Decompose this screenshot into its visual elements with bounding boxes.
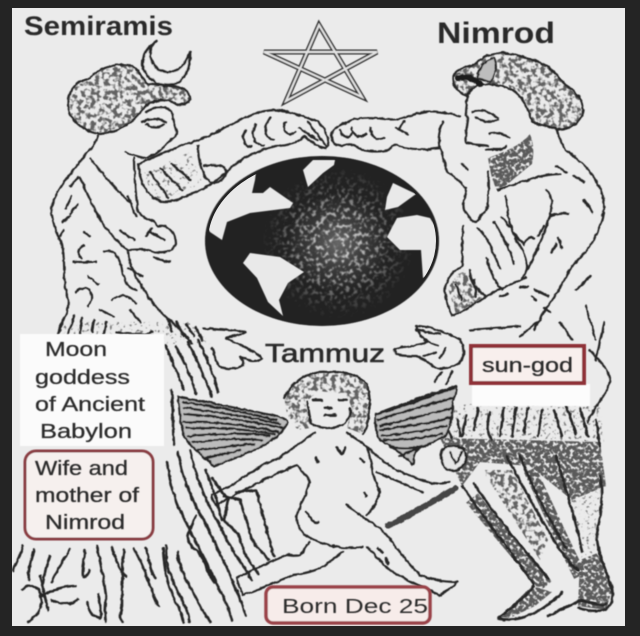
Nimrod calf and feet grain (578, 552, 612, 610)
Tammuz face (307, 402, 351, 428)
Nimrod right arm contour (588, 350, 610, 422)
icon: crescent moon (143, 41, 190, 85)
Tammuz staff (388, 488, 456, 526)
texture: dark grain in hair, beard, legs and sleeves (60, 53, 612, 618)
white panel: below sun-god (472, 384, 590, 406)
Semiramis sleeve grain (60, 152, 212, 345)
Tammuz left wing (178, 397, 288, 466)
Semiramis upper skirt lines (166, 340, 218, 444)
Nimrod waist fringe (440, 406, 600, 446)
heading: Nimrod: Nimrod (437, 17, 555, 50)
callout: Born Dec 25 (266, 587, 430, 623)
white panel: moon goddess caption (20, 334, 164, 446)
Nimrod hair grain (453, 53, 583, 130)
callout: sun-god (471, 346, 584, 383)
Semiramis lower hand (204, 328, 262, 369)
callout: sun-god: sun-god (482, 355, 573, 377)
globe (205, 155, 442, 330)
figure: Semiramis (13, 41, 328, 622)
Semiramis dress bodice (52, 154, 192, 344)
pentagram (264, 25, 377, 101)
globe: light land masses (205, 160, 442, 316)
Nimrod rear shin band (530, 470, 580, 576)
Nimrod lower pointing hand (394, 326, 463, 369)
Semiramis foot flourish (22, 576, 101, 622)
Tammuz hair grain (285, 372, 370, 434)
Semiramis pointing sleeve (138, 110, 328, 202)
heading: Semiramis: Semiramis (24, 11, 173, 41)
Nimrod leg outlines (462, 456, 613, 620)
Tammuz body and limbs (212, 433, 450, 548)
caption: Moon goddess of Ancient Babylon: of Ancient (35, 394, 146, 416)
figure: Nimrod (331, 53, 613, 620)
Tammuz right wing (375, 386, 457, 464)
Nimrod beard grain (488, 134, 533, 192)
caption: Moon goddess of Ancient Babylon: Moon (45, 339, 107, 361)
caption: Moon goddess of Ancient Babylon: Babylon (40, 421, 132, 443)
Semiramis lower skirt lines (166, 450, 274, 622)
callout: Wife and mother of Nimrod: mother of (35, 485, 140, 507)
callout: Wife and mother of Nimrod: Nimrod (45, 512, 125, 534)
Nimrod loins grain (440, 438, 606, 500)
Nimrod pointing arm (331, 111, 489, 222)
Nimrod torso and shoulder (498, 128, 604, 330)
Tammuz hair outline (285, 372, 370, 434)
callout: Wife and mother of Nimrod (25, 451, 153, 539)
heading: Tammuz: Tammuz (265, 338, 385, 368)
Nimrod belt buckle (441, 446, 466, 470)
callout: Wife and mother of Nimrod: Wife and (35, 458, 128, 480)
caption: Moon goddess of Ancient Babylon: goddess (35, 367, 130, 389)
Nimrod forearm and lower body (445, 222, 526, 316)
callout: Born Dec 25: Born Dec 25 (282, 596, 428, 618)
Nimrod fringe grain (440, 404, 604, 442)
Nimrod front shin band (472, 498, 546, 586)
Nimrod forearm hair grain (448, 268, 486, 314)
Semiramis face and neck (86, 108, 177, 158)
Semiramis hair grain (68, 65, 190, 134)
figure: Tammuz (178, 372, 457, 595)
Nimrod hair outline (453, 53, 583, 130)
caption: Moon goddess of Ancient Babylon (35, 339, 146, 443)
Nimrod thigh grain (482, 470, 548, 560)
Semiramis ruffle at waist (58, 316, 202, 340)
Semiramis hair outline (68, 65, 190, 134)
Nimrod face (465, 96, 510, 150)
